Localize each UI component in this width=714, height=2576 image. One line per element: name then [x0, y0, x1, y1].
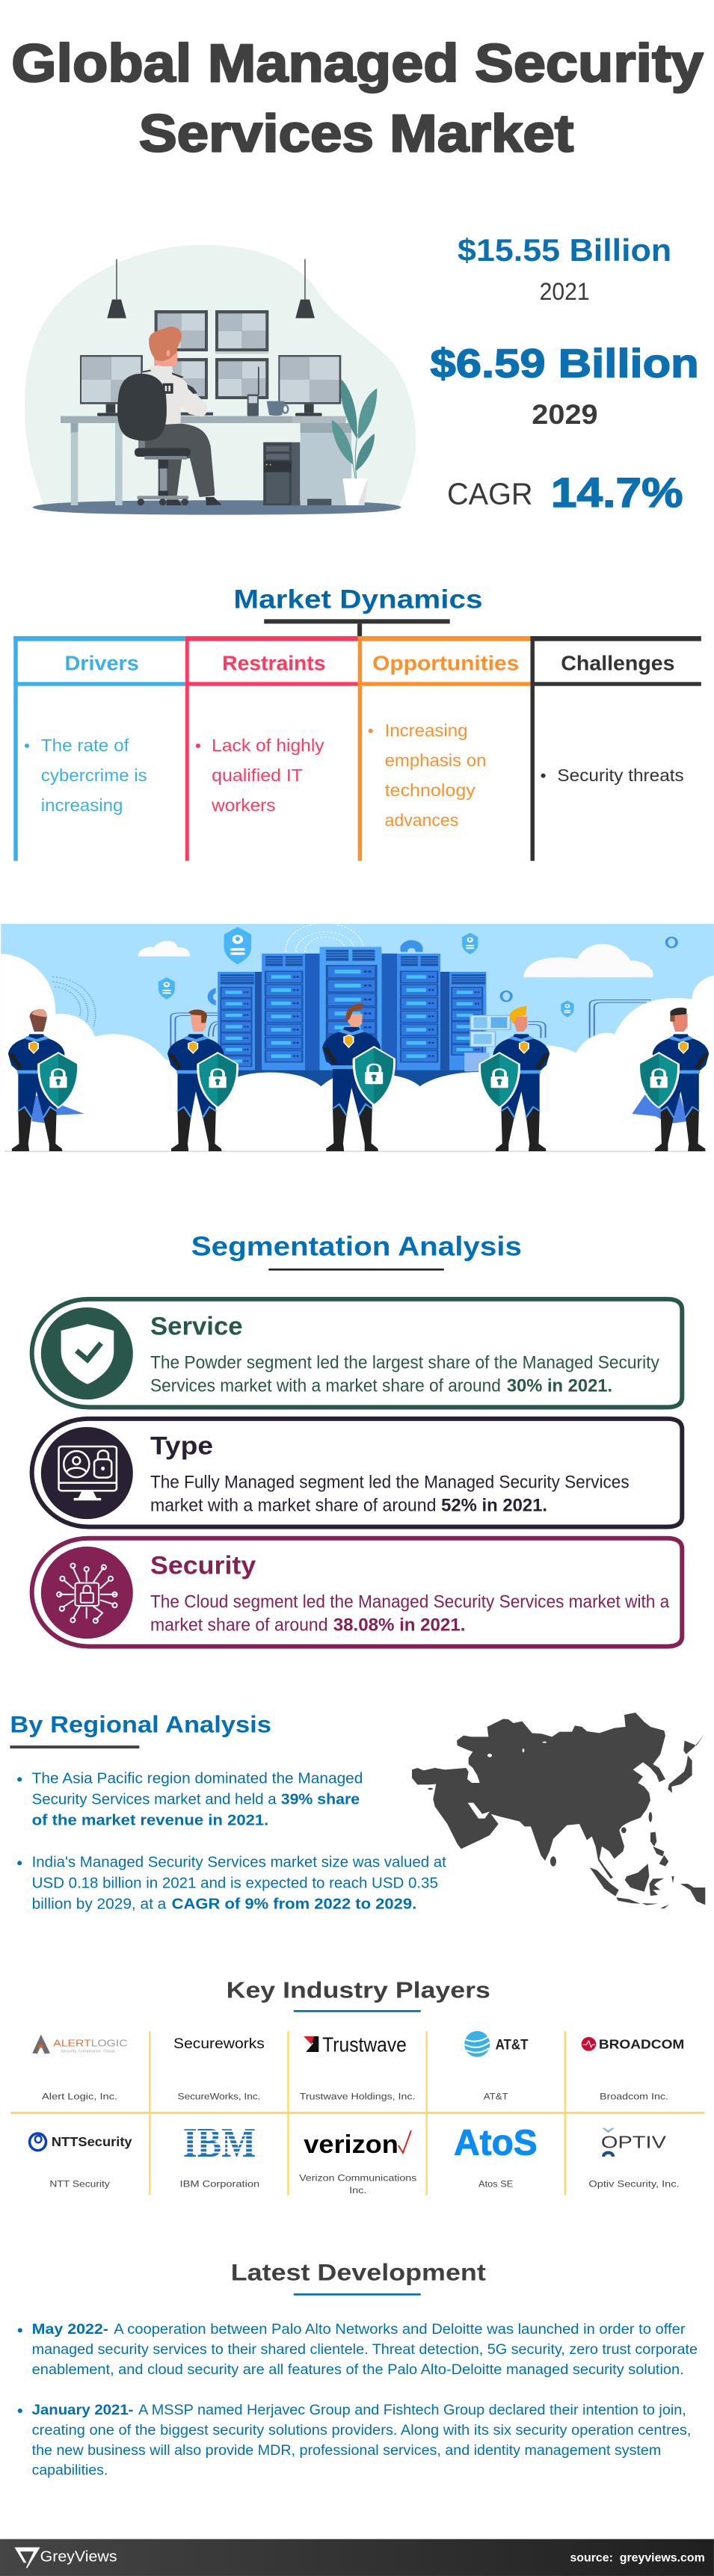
- player: Verizon: [299, 2130, 416, 2196]
- icon: circuit lock: [41, 1547, 133, 1639]
- title: [11, 34, 704, 163]
- icon: monitor with user and lock: [41, 1427, 133, 1519]
- map: Asia Pacific: [412, 1713, 705, 1908]
- player: SecureWorks: Secureworks: [173, 2036, 265, 2052]
- security operator: [117, 327, 222, 505]
- column: opportunities: Increasing: [385, 721, 467, 740]
- bullet: May 2022: [18, 2321, 698, 2378]
- player: SecureWorks: [173, 2036, 265, 2101]
- desk: [61, 416, 351, 505]
- hero 4: [480, 1006, 550, 1151]
- player: NTT Security: NTT Security: [49, 2179, 110, 2189]
- card: security: [32, 1538, 682, 1646]
- title: Services Market: [139, 104, 573, 163]
- bullet: January 2021: January 2021-: [32, 2402, 133, 2418]
- server racks: [218, 947, 486, 1094]
- heading: Key Industry Players: [227, 1977, 490, 2003]
- year 2021: 2021: [540, 277, 590, 305]
- column: restraints: workers: [211, 796, 275, 815]
- hero 2: [167, 1009, 237, 1151]
- player: NTT Security: [30, 2133, 132, 2189]
- monitors: [80, 310, 341, 416]
- small clouds: [138, 941, 653, 977]
- potted plant: [332, 379, 377, 505]
- card: type: 52% in 2021.: [441, 1495, 547, 1515]
- floor: [32, 500, 401, 515]
- bullet: Asia Pacific: [17, 1770, 363, 1828]
- background blob: [25, 245, 416, 510]
- hero 5: [632, 1008, 709, 1151]
- card: service: 30% in 2021.: [507, 1375, 612, 1396]
- market size figures: [431, 233, 699, 516]
- illustration: security operator at monitors: [25, 245, 416, 515]
- bullet: Asia Pacific: of the market revenue in 2021.: [32, 1812, 268, 1828]
- hanging lamps: [107, 259, 315, 318]
- bullet: Asia Pacific: The Asia Pacific region dominated the Managed: [32, 1770, 363, 1787]
- player: NTT Security: NTTSecurity: [52, 2134, 132, 2149]
- player: Optiv: OPTIV: [601, 2133, 667, 2152]
- bullet: Asia Pacific: Security Services market and held a: [32, 1791, 277, 1808]
- column: opportunities: Opportunities: [372, 652, 519, 675]
- column: restraints: Restraints: [222, 652, 325, 675]
- column: restraints: qualified IT: [212, 766, 303, 785]
- bullet: May 2022: May 2022-: [32, 2321, 108, 2338]
- grid lines: [10, 2031, 704, 2196]
- player: Trustwave: Trustwave: [322, 2033, 407, 2056]
- card: service: [32, 1299, 682, 1408]
- player: Optiv: [588, 2128, 680, 2189]
- connector: [264, 619, 450, 636]
- bullet: January 2021: capabilities.: [32, 2462, 108, 2478]
- icon: shield check: [41, 1307, 133, 1399]
- column: restraints: [185, 636, 358, 861]
- ground line: [4, 1150, 707, 1152]
- dashboard screens: [464, 1015, 511, 1071]
- column: opportunities: [358, 636, 530, 861]
- illustration: cyber security heroes and servers: [1, 923, 714, 1152]
- foreground clouds: [1, 954, 714, 1151]
- column: drivers: cybercrime is: [41, 766, 147, 785]
- heading: Segmentation Analysis: [191, 1231, 522, 1262]
- panel: key industry players: [10, 1977, 704, 2196]
- bullet: Asia Pacific: 39% share: [281, 1791, 360, 1808]
- hero 1: [8, 1009, 84, 1151]
- player: Broadcom: Broadcom Inc.: [600, 2091, 668, 2101]
- logo mark: [14, 2548, 40, 2568]
- CAGR label: CAGR: [447, 477, 533, 511]
- player: AT&T: [464, 2031, 529, 2101]
- card: security: Security: [150, 1550, 256, 1580]
- column: drivers: The rate of: [41, 736, 129, 755]
- logo text: GreyViews: [40, 2548, 117, 2565]
- card: security: market share of around: [150, 1615, 327, 1635]
- player: Alert Logic: LOGIC: [91, 2038, 128, 2048]
- column: drivers: [13, 636, 185, 861]
- column: drivers: increasing: [41, 796, 123, 815]
- card: type: Type: [150, 1431, 213, 1460]
- dotted signal arcs: [52, 923, 363, 1026]
- player: IBM: IBM Corporation: [180, 2179, 259, 2189]
- panel: latest development: [18, 2259, 698, 2478]
- player: IBM: IBM: [183, 2119, 256, 2166]
- bullet: January 2021: [18, 2402, 691, 2478]
- column: drivers: Drivers: [64, 652, 139, 675]
- player: Trustwave: [300, 2033, 415, 2101]
- circuit lines: [170, 1000, 651, 1049]
- year 2029: 2029: [532, 399, 598, 431]
- bullet: India: [17, 1854, 446, 1912]
- player: Alert Logic: [32, 2035, 128, 2101]
- heading: Latest Development: [231, 2259, 486, 2285]
- card: security: 38.08% in 2021.: [333, 1615, 465, 1635]
- player: SecureWorks: SecureWorks, Inc.: [178, 2091, 260, 2101]
- player: Alert Logic: ALERT: [53, 2038, 91, 2048]
- player: Atos: [454, 2122, 538, 2189]
- heading: By Regional Analysis: [10, 1711, 271, 1737]
- panel: market dynamics: [13, 584, 701, 861]
- player: Verizon: verizon: [304, 2130, 398, 2158]
- player: IBM: [180, 2119, 259, 2189]
- player: AT&T: AT&T: [484, 2091, 508, 2101]
- hero 3: [322, 1003, 394, 1151]
- player: Trustwave: Trustwave Holdings, Inc.: [300, 2091, 415, 2101]
- panel: key industry players: AT&T: [496, 2036, 529, 2053]
- footer: [0, 2539, 714, 2576]
- CAGR value: 14.7%: [551, 469, 683, 516]
- column: restraints: Lack of highly: [212, 736, 324, 755]
- column: opportunities: emphasis on: [385, 751, 486, 770]
- column: opportunities: technology: [385, 781, 476, 800]
- card: service: Service: [150, 1312, 243, 1340]
- operator scene: [32, 259, 401, 515]
- radio and mug: [247, 367, 288, 416]
- heading: Market Dynamics: [233, 584, 483, 614]
- player: Alert Logic: Security. Compliance. Cloud.: [61, 2049, 116, 2053]
- player: Atos: AtoS: [454, 2122, 538, 2163]
- panel: segmentation analysis: [32, 1231, 682, 1646]
- shield icons: [159, 927, 573, 1017]
- column: challenges: [530, 636, 701, 861]
- player: Verizon: Inc.: [349, 2185, 366, 2196]
- player: Verizon: Verizon Communications: [299, 2173, 416, 2183]
- player: Broadcom: [582, 2036, 684, 2101]
- card: type: [32, 1419, 682, 1527]
- column: opportunities: advances: [385, 811, 458, 830]
- card: type: market with a market share of around: [150, 1495, 436, 1515]
- value 2021: $15.55 Billion: [458, 233, 671, 268]
- bullet: India: CAGR of 9% from 2022 to 2029.: [172, 1896, 416, 1912]
- bullet: India: billion by 2029, at a: [32, 1896, 167, 1912]
- player: Alert Logic: Alert Logic, Inc.: [42, 2091, 117, 2101]
- sky: [1, 924, 714, 1094]
- gears: [208, 937, 677, 1005]
- panel: regional analysis: [10, 1711, 446, 1912]
- player: Atos: Atos SE: [478, 2179, 513, 2189]
